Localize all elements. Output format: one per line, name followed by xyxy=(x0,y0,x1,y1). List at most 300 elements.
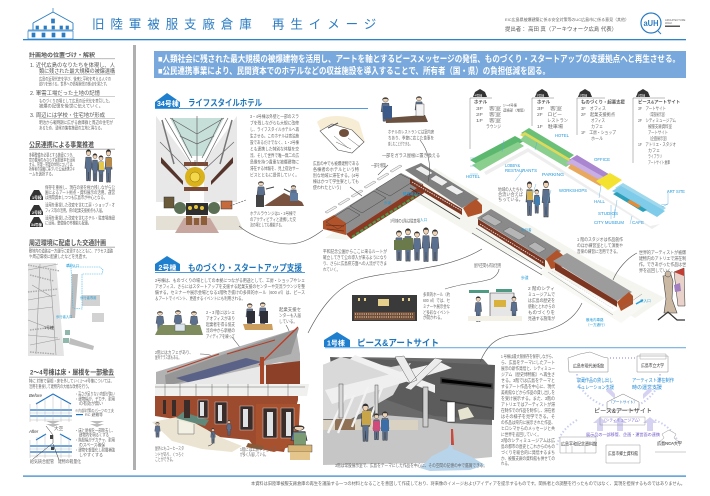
text: artist caption: 界を巡回していく。 xyxy=(639,267,675,274)
section: after: のスペース確保 xyxy=(79,442,105,448)
illustration: hall event details xyxy=(355,298,413,317)
section: before: ・建物幅が、デカチ、耐用 xyxy=(75,396,115,402)
text: museum caption: 見通する施策が xyxy=(528,315,555,322)
section: after: しやすくする xyxy=(79,452,103,458)
icon: architour logo: ARCHITECTURE xyxy=(665,18,686,22)
heading: public private: 公民連携による事業推進 xyxy=(29,140,94,149)
text: point 3 xyxy=(30,111,115,132)
labels: floor plan use labels: RESTAURANTS xyxy=(505,168,537,173)
center: peace art site: （シティミュージアム） xyxy=(602,418,642,422)
heading: hotel xyxy=(155,93,368,109)
labels: central notes: 入口 xyxy=(420,218,428,222)
text: number 1 description: に世界を巡回していく。 xyxy=(501,431,541,438)
text: hotel description: し、ライフスタイルホテルへ再 xyxy=(250,126,299,133)
text: museum caption: ミュージアムで xyxy=(528,292,555,298)
arrow: number 1 leader xyxy=(480,303,582,362)
text: workshop note: 1階には工房やショップ xyxy=(240,446,276,453)
text: number 1 description: 2階のシティミュージアムは広 xyxy=(501,437,555,444)
illustration: restaurant diners xyxy=(381,96,428,123)
text: museum caption xyxy=(528,285,555,322)
text: restaurant caption: 楽しむことができる。 xyxy=(388,140,412,148)
text: building 1: 園によるアート拠点・資料展示の活用。運営 xyxy=(45,189,115,196)
labels: central notes: 歩道 xyxy=(521,275,529,280)
labels: floor program columns: 3F 客室 xyxy=(476,105,502,112)
text: terrace note: 2階にはカフェがあり、 xyxy=(155,349,193,356)
text: point 3: 3. 周辺には学校・住宅地が形成 xyxy=(30,111,105,119)
text: number 1 description: せる。3階では広島をテーマと xyxy=(501,377,555,384)
arrow: lounge leader xyxy=(230,200,246,206)
text: number 1 description: 島の都市の歴史とこれからのもの xyxy=(501,443,555,450)
text: curation: 収蔵作品の貸し出し xyxy=(577,377,613,384)
labels: floor program columns: 2F ロビー xyxy=(537,111,562,117)
text: foot traffic: れていく。 xyxy=(323,267,340,273)
text: remove floor note: 一部を増築 xyxy=(371,162,386,169)
building: NCA university: 広島NCA大学 xyxy=(657,440,683,447)
labels: floor plan use labels: LOBBY& xyxy=(505,163,520,168)
header credit: EIC広島県被爆建築に係る安全対策等のUC広島市に係る意見（其他） xyxy=(505,16,629,22)
arrow: number 2 leader xyxy=(308,249,482,333)
text: startup center: している。 xyxy=(279,319,297,324)
text: hotel description: ブを残しながらも大規に改修 xyxy=(250,120,299,126)
text: startup center xyxy=(279,306,301,324)
text: hall caption xyxy=(423,291,450,321)
illustration: museum booth xyxy=(468,289,522,322)
labels: central notes: 歩行者 xyxy=(521,227,532,232)
labels: floor program columns: 1～4号棟 xyxy=(503,102,518,108)
text: coffee stand note: ンドがあり、くつろぐ xyxy=(155,451,184,458)
text: hall caption: 600 ㎡）では、セ xyxy=(423,297,450,304)
heading: number 2 xyxy=(155,256,305,273)
center: peace art site: （アートサイト） xyxy=(609,400,637,404)
text: point 3: あるため、通常の集客施設の立地と異なる。 xyxy=(39,124,104,132)
labels: floor program columns: 3F アートサイト xyxy=(638,106,666,112)
text: artist caption xyxy=(639,249,686,274)
text: family caption: 合流い合えば xyxy=(498,191,523,198)
arcs: dotted links xyxy=(610,357,640,359)
text: studio caption xyxy=(577,236,623,255)
text: shared office: 2・3 階にはシェ xyxy=(206,309,235,316)
text: terrace note xyxy=(155,349,193,361)
icon: group of people xyxy=(85,150,112,182)
section: before: Before xyxy=(29,393,42,398)
section: after xyxy=(28,425,115,465)
labels: central notes: 駐車場入口 xyxy=(403,191,421,196)
text: hotel description: とも連携した特別な体験を交 xyxy=(250,146,299,152)
text: building 1: 1号棟 xyxy=(32,195,42,200)
illustration: hotel atrium lines xyxy=(160,116,234,225)
labels: floor plan use labels: CAFE xyxy=(632,220,644,225)
panel: floor plan diagram xyxy=(466,89,685,225)
text: artist caption: 世界的アーティストが被爆 xyxy=(639,249,686,256)
text: number 2 description: アオフィス、さらにはスタートアップを支援する起業支援のセンターや交流ラウンジを整 xyxy=(155,283,305,290)
text: point 1: 広島の近現代史を学び、後来と平和を考える人々の xyxy=(39,76,111,82)
text: bed caption xyxy=(313,160,359,191)
illustration: number 2 facade details xyxy=(155,400,294,450)
text: number 1 description: か、被服支廠の資料館も併せての xyxy=(501,455,555,462)
text: number 2 description: 備する。セミナーや展示会場となる1階吹き抜けの多目的ホール（600 ㎡）は、ピース xyxy=(155,289,305,296)
text: shared office xyxy=(206,309,235,340)
illustration: hotel lounge xyxy=(256,181,304,207)
text: point 1: 1. 近代広島のなりたちを体現し、人 xyxy=(30,61,115,69)
text: point 3: 明治から戦時期に広がる倉庫群と周辺の住宅が xyxy=(39,119,113,126)
text: public private xyxy=(29,152,75,178)
number 1 interior blocks xyxy=(323,355,495,471)
text: family caption xyxy=(498,186,523,203)
header credit: 提出者： 高田 真（アーキウォーク広島 代表） xyxy=(505,25,617,33)
labels: floor program columns: 3号棟 xyxy=(536,92,544,98)
labels: central notes: （一方通行） xyxy=(586,322,607,327)
text: family caption: 地域の人たちも xyxy=(498,186,523,193)
panel: central isometric details xyxy=(325,165,651,327)
labels: floor plan use labels: HOTEL xyxy=(555,133,570,138)
labels: floor program columns: 3F 客室 xyxy=(537,105,563,112)
section: after: 建物の軽量化 xyxy=(58,458,81,465)
section: after: ・床と屋根を一部除去し、 xyxy=(75,427,115,434)
text: buildings 3-4 xyxy=(30,214,115,227)
text: curation: キュレーション支援 xyxy=(577,384,614,391)
text: artist support: アーティスト滞在制作 xyxy=(632,377,674,384)
labels: floor program columns: 2号棟 xyxy=(580,92,587,98)
text: workshop note xyxy=(240,446,276,458)
text: hotel description: 設であるだけでなく、1・2号棟 xyxy=(250,139,299,146)
labels: floor program columns: 2F シティミュージアム xyxy=(638,118,676,124)
labels: floor program columns: 連絡部（増築） xyxy=(503,108,527,112)
arrows: up and down arrows xyxy=(593,387,657,431)
chart: peace art site network xyxy=(557,352,686,463)
arcs: lavender links xyxy=(557,374,679,446)
labels: floor program columns: ピース&アートサイト xyxy=(638,100,680,106)
arrow: bed leader xyxy=(350,140,430,196)
text: building 2: 活用を重視した改変を含む工房・ショップ・オ xyxy=(45,202,115,208)
text: building 2: 2号棟 xyxy=(32,210,42,215)
text: traffic xyxy=(29,248,113,260)
text: number 1 description: の作品は県内に展示された作品、 xyxy=(501,419,555,426)
text: restaurant caption xyxy=(388,128,434,148)
text: shared office: アオフィスがあり xyxy=(206,315,235,322)
labels: floor program columns: ホテル xyxy=(537,98,551,106)
labels: floor program columns: ホテル xyxy=(474,98,488,106)
header line xyxy=(23,39,686,40)
text: hall caption: 多目的ホール（約 xyxy=(423,291,450,298)
text: number 1 description: 美術館などから作品の貸し出しを xyxy=(501,389,555,396)
map: surrounding area: 歩行者入口 xyxy=(56,314,72,319)
labels: central notes: 3号棟の1階は駐車場 xyxy=(390,218,420,224)
text: lounge caption: ホテルラウンジは1・2号棟で xyxy=(250,210,296,217)
panel: left column xyxy=(28,51,115,465)
text: hotel description: ビスとともに提供していく。 xyxy=(250,172,299,178)
text: point 2: 被爆の記憶を後世に伝えていく。 xyxy=(39,102,103,110)
text: museum caption: ものづくりを xyxy=(528,309,555,316)
text: family caption: ちっている。 xyxy=(498,197,523,203)
arrows: building 2 annotations xyxy=(200,325,294,446)
labels: central notes: 歩道 xyxy=(384,200,392,205)
floor plan blocks xyxy=(470,128,666,229)
summary band: ■公民連携事業により、民間資本でのホテルなどの収益施設を導入することで、所有者（国・県）の負担低減を図る。 xyxy=(158,65,550,76)
summary band xyxy=(154,51,686,78)
text: bed caption: 使われたという) xyxy=(313,184,341,191)
arrow: hall leader xyxy=(445,269,499,289)
text: foot traffic: り、さらに広島県方面への人流ができま xyxy=(323,260,387,267)
text: buildings 3-4: に活用。整備後の市機能も配置。 xyxy=(45,220,91,226)
text: point 2 xyxy=(30,89,115,110)
labels: floor program columns: カフェ xyxy=(591,124,603,130)
labels: floor program columns: 1号棟 xyxy=(638,92,645,98)
building: contemporary art museum: 広島市現代美術館 xyxy=(573,362,605,370)
footer line xyxy=(23,476,686,477)
text: shared office: アイディアを練って xyxy=(206,333,235,340)
heading: site meaning: 計画地の位置づけ・解釈 xyxy=(29,51,95,59)
arrow: hotel leader xyxy=(239,226,323,244)
text: museum caption: 2 階のシティ xyxy=(528,285,555,292)
text: shared office: 流の中から新規の xyxy=(206,327,235,334)
labels: floor program columns: （企画展示室） xyxy=(648,135,669,142)
labels: central notes: 屋外空間も有効活用 xyxy=(474,262,501,269)
labels: floor program columns: 4号棟 xyxy=(474,92,482,98)
text: buildings 3-4: 34号棟 xyxy=(31,222,42,227)
column divider xyxy=(133,45,136,470)
labels: floor plan use labels: STUDIOS xyxy=(598,211,618,216)
labels: floor plan use labels: ART SITE xyxy=(667,189,685,194)
heading: number 1: 1号棟 xyxy=(327,338,345,348)
text: startup center: 起業支援セ xyxy=(279,306,301,313)
labels: floor program columns: 1F 工房・ショップ xyxy=(581,130,616,136)
atrium blocks xyxy=(156,116,243,233)
text: shared office: 起業者を得る協支 xyxy=(206,321,235,328)
heading: traffic: 周辺環境に配慮した交通計画 xyxy=(29,238,106,247)
labels: floor plan use labels: CITY MUSEUM xyxy=(594,220,625,225)
labels: central notes: 東入口 xyxy=(640,298,651,303)
text: public private: 所有者の協働に基づいた公民連携スキ xyxy=(29,166,75,172)
heading: number 2: ものづくり・スタートアップ支援 xyxy=(188,262,302,273)
text: museum caption: は広島の歴史を xyxy=(528,297,555,304)
text: public private: 官の費用のみならず民間資本を活用 xyxy=(29,156,75,164)
text: lounge caption: 流の場としても機能する。 xyxy=(250,222,284,228)
labels: floor program columns: ホール xyxy=(591,136,603,141)
text: hall caption: が開かれる。 xyxy=(423,314,444,321)
text: point 1 xyxy=(30,61,115,88)
text: lounge caption xyxy=(250,210,296,228)
text: restaurant caption: ホテルのレストランには室内席 xyxy=(388,128,434,136)
labels: floor program columns: 2F 起業支援拠点 xyxy=(581,111,615,118)
text: hotel description: 滞在する体験を、見上宿泊サー xyxy=(250,165,299,172)
illustration: number 1 interior details xyxy=(328,356,492,445)
text: bed caption: 各棟者のホテルという特 xyxy=(313,166,359,173)
heading: hotel: ライフスタイルホテル xyxy=(188,97,262,108)
text: number 1 description: アトリエではアーティストが滞 xyxy=(501,401,555,408)
text: number 1 description: ジアム（歴史博物館）へ再生さ xyxy=(501,371,555,378)
text: traffic: や周辺環境に配慮したなどを見直す。 xyxy=(29,253,89,260)
text: bed caption: 別な地域に滞在する。(4号 xyxy=(313,172,359,179)
section: after: ・建物を軽量化し耐震補強 xyxy=(75,446,115,454)
heading: hotel: 34号棟 xyxy=(157,99,179,108)
panel: number 2 building xyxy=(155,256,312,463)
icon: down arrows xyxy=(46,421,104,427)
text: glass roof note: 一部をガラス屋根に置き換える xyxy=(382,152,440,159)
text: artist caption: 作。できあがった作品は世 xyxy=(639,261,686,268)
heading: number 2: 2号棟 xyxy=(158,263,176,272)
text: number 1 description: 1 号棟は最大限保存を保存しながら、 xyxy=(501,353,555,360)
central complex blocks xyxy=(323,163,664,322)
building: peace memorial museum: 広島平和記念資料館 xyxy=(561,440,598,448)
text: curation xyxy=(577,377,614,391)
text: roof removal: 活用を重視して建物内の大幅な改修を行う。 xyxy=(29,383,91,390)
center: peace art site: ピース&アートサイト xyxy=(594,408,652,415)
text: lounge caption: のアクティビティと連携した交 xyxy=(250,216,296,223)
text: number 1 description: づくりを総合的に発信するまち xyxy=(501,449,555,456)
text: foot traffic xyxy=(323,248,387,273)
text: coffee stand note xyxy=(155,445,184,463)
text: number 1 caption: 3階は常設展示室で、広島をテーマにした作品を中心に、その空間の記憶の中で鑑賞できる。 xyxy=(335,462,487,469)
text: coffee stand note: ことができる。 xyxy=(155,456,175,463)
text: point 2: ものづくりの場として広島の近代化を牽引した。 xyxy=(39,98,112,104)
icon: warehouse logo xyxy=(28,8,73,39)
text: bed caption: 広島の中でも被爆建物である xyxy=(313,160,359,167)
text: number 1 description: はその様子を見学できる。そ xyxy=(501,413,555,420)
text: artist support: 時の運営支援 xyxy=(632,384,662,391)
text: coffee stand note: 屋外にもコーヒースタ xyxy=(155,445,184,452)
building: number 2 details xyxy=(472,214,546,275)
illustration: hotel bed xyxy=(317,116,365,153)
labels: floor program columns: 被服支廠資料室 xyxy=(648,123,672,130)
text: public private: する。管理・管理の体制については、 xyxy=(29,161,75,168)
illustration: startup staff xyxy=(243,302,273,330)
section: after: ・階段幅がデカチャ、耐用 xyxy=(75,436,115,444)
center: peace art site xyxy=(594,394,652,425)
text: number 1 description: 展示の新作発信と、シティミュー xyxy=(501,365,555,372)
labels: floor program columns: ライブラリ xyxy=(648,153,662,160)
heading: roof removal: 2～4号棟は床・屋根を一部撤去 xyxy=(30,368,114,376)
title: 旧陸軍被服支廠倉庫 xyxy=(92,18,258,32)
text: building 1 xyxy=(30,184,115,201)
map: surrounding area xyxy=(28,263,103,355)
text: public private: 多額整備を必要とする施設につき、 xyxy=(29,152,75,158)
text: point 1: 類に残された最大規模の被爆遺構 xyxy=(39,67,115,75)
number 2 roof blocks xyxy=(155,328,309,396)
text: museum caption: 感動ととれからの xyxy=(528,303,555,310)
text: number 1 description xyxy=(501,353,555,467)
panel: hotel 34 xyxy=(155,93,440,228)
text: hotel description xyxy=(250,113,299,178)
section: after: 給気統合配管 xyxy=(30,458,54,465)
text: roof removal xyxy=(29,378,114,390)
title suffix: 再生イメージ xyxy=(272,18,382,32)
text: foot traffic: 確立してきて公の導入が来るようになり xyxy=(323,254,387,261)
text: startup center: ンターも入居 xyxy=(279,312,301,319)
section: before: RC 避難等 xyxy=(85,412,103,417)
icon: architour logo: aUH xyxy=(644,18,658,28)
text: artist support xyxy=(632,377,674,391)
labels: floor program columns: 3F オフィス xyxy=(581,106,606,111)
labels: floor program columns: ものづくり・起業支援 xyxy=(581,98,626,106)
labels: floor plan use labels xyxy=(466,133,685,225)
icon: architour logo xyxy=(641,13,686,34)
illustration: craftswoman xyxy=(288,426,312,460)
text: foot traffic: 平和記念公園からここに来るルートが xyxy=(323,248,387,255)
panel: number 1 building xyxy=(324,332,686,469)
text: point 2: 2. 軍需工場だった土地の記憶 xyxy=(30,89,100,97)
building: folk museum: 広島市郷土資料館 xyxy=(608,450,639,457)
labels: floor program columns: 1F 客室 xyxy=(476,117,502,124)
text: number 1 description: ら、広島をテーマにしたアート xyxy=(501,359,555,366)
illustration: family xyxy=(526,181,550,217)
text: number 1 description: するアート作品を中心に、現代 xyxy=(501,383,555,390)
text: hotel description: 島像を持つ貴重な被爆建物に xyxy=(250,158,299,166)
text: number 2 description xyxy=(155,277,305,302)
labels: floor program columns: カフェ xyxy=(648,148,660,154)
labels: floor program columns: 1F 駐車場 xyxy=(537,123,563,130)
labels: floor program columns: 1F アトリエ・スタジオ xyxy=(638,141,676,148)
section: before: ※内部対策のパーツの工夫 xyxy=(75,408,114,413)
text: number 1 description: を受け展示する。また、3階の xyxy=(501,395,555,402)
labels: floor program columns: （常設展示室） xyxy=(648,111,667,118)
building: west wing details xyxy=(325,165,417,237)
text: bed caption: 棟はかつて学生寮としても xyxy=(313,178,359,185)
labels: floor program columns: レストラン xyxy=(547,118,568,124)
text: building 2 xyxy=(30,202,115,215)
text: hall caption: ど多彩なイベント xyxy=(423,309,450,316)
building: east wing details xyxy=(410,166,464,219)
text: number 1 description: れる。 xyxy=(501,461,511,467)
text: hotel description: 生させる。このホテルは宿泊施 xyxy=(250,132,299,140)
text: number 2 description: 2号棟は、ものづくりの場としての本拠につながる用途として、工房・ショップやシェ xyxy=(155,277,305,284)
chart: floor plan leaders xyxy=(470,140,668,224)
section: before: ・高さが足りない内部が狭い xyxy=(75,390,115,398)
text: roof removal: 特に 対策で屋根・床を外していく2～4号棟については、 xyxy=(29,378,114,384)
labels: floor plan use labels: PARKING xyxy=(542,172,564,177)
labels: floor plan use labels: HALL xyxy=(594,199,606,204)
map: surrounding area: 歩行者専用 xyxy=(80,295,96,300)
number 2 facade blocks xyxy=(152,396,300,452)
section: after: After xyxy=(28,429,39,434)
labels: central notes xyxy=(384,191,651,327)
building: city university: 広島市立大学 xyxy=(641,362,665,369)
labels: floor program columns: アートサイト xyxy=(648,130,668,136)
text: number 1 description: ヒロシマからのメッセージと共 xyxy=(501,425,555,432)
text: studio caption: のほか練習室として演奏や xyxy=(577,242,623,249)
map: surrounding area: 車両入口 xyxy=(66,263,79,268)
labels: floor plan use labels: OFFICE xyxy=(594,157,610,162)
header credit xyxy=(505,16,629,33)
text: workshop note: が多く入居している。 xyxy=(240,451,268,458)
labels: floor plan use labels: WORKSHOPS xyxy=(559,188,587,193)
labels: floor plan use labels: HOTEL xyxy=(466,174,481,179)
labels: central notes: 敷地内車路 xyxy=(586,317,604,322)
text: restaurant caption: ちあり、季節に応じた食事を xyxy=(388,134,434,142)
text: point 1: 訪れを受ける。世界への情報発信の拠点を果たす。 xyxy=(39,80,109,88)
illustration: crowd xyxy=(394,228,439,261)
building: number 1 details xyxy=(548,271,643,315)
text: artist caption: 建物内のアトリエで滞在制 xyxy=(639,255,686,262)
labels: floor program columns: ラウンジ xyxy=(486,123,501,130)
text: traffic: 敷地内の道路は一方通行に変更するとともに、アクセス道路 xyxy=(29,248,113,254)
text: number 2 description: ＆アートでイベント、更進するイベントにも利用される。 xyxy=(155,295,245,302)
map tint xyxy=(28,263,104,356)
map: surrounding area: 1号棟 xyxy=(44,325,54,330)
text: building 1: 保存を重視し、現在の姿を極力残しながら公 xyxy=(45,184,115,191)
text: hall caption: ミナーや展示会な xyxy=(423,303,450,310)
illustration: workshop team xyxy=(155,310,203,335)
icon: architour logo: WALK xyxy=(665,21,673,25)
labels: floor program columns: 2F 客室 xyxy=(476,111,502,118)
text: public private: ームを選択する。 xyxy=(29,170,55,178)
text: buildings 3-4: 活用を重視した改変を含むホテル・駐車場施設 xyxy=(45,214,115,222)
text: studio caption: 1 階のスタジオは作品創作 xyxy=(577,236,623,243)
text: hotel description: 流、そして世界で唯一無二の広 xyxy=(250,152,299,159)
text: terrace note: 屋外テラス席もある。 xyxy=(155,354,181,361)
text: building 1: は民間資本しつつも広島市が中心となる。 xyxy=(45,194,107,201)
heading: number 1 xyxy=(324,332,686,348)
labels: floor program columns: オフィス xyxy=(591,118,605,123)
